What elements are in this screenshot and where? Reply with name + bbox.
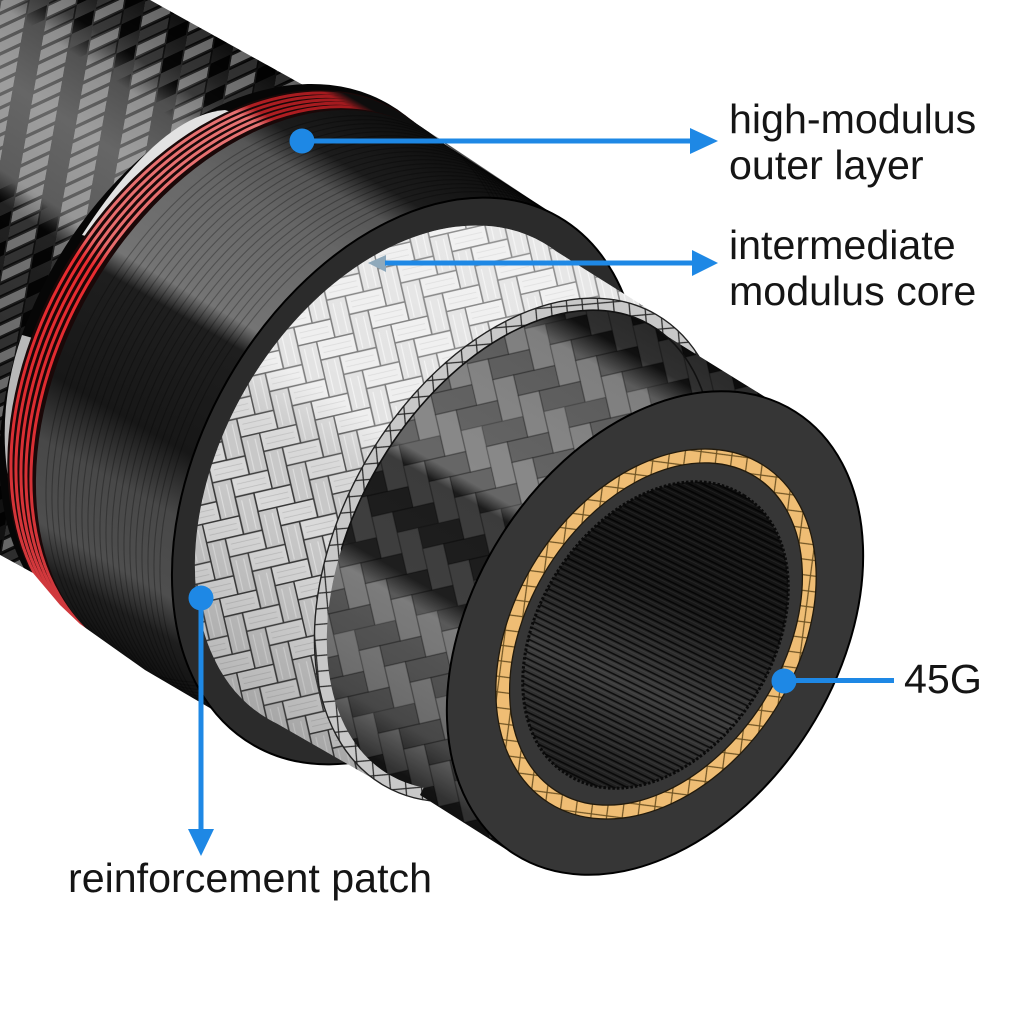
dark woven carbon barrel (326, 311, 765, 850)
callout: intermediate modulus core: intermediate (729, 222, 956, 268)
inner bore with ribbed surface (523, 482, 788, 788)
callout: intermediate modulus core: modulus core (729, 268, 976, 314)
front end face (361, 314, 949, 952)
callout: high-modulus outer layer (290, 96, 976, 188)
45G gold ring (430, 390, 882, 878)
callout: high-modulus outer layer: outer layer (729, 142, 924, 188)
callout: reinforcement patch (68, 586, 432, 901)
intermediate modulus core: white herringbone weave (194, 226, 651, 778)
far section: woven carbon tube (0, 0, 302, 568)
callout: 45G (772, 656, 982, 702)
callout: 45G: 45G (904, 656, 982, 702)
red stripe band (0, 5, 577, 743)
hatched edge ring of weave layer (230, 225, 810, 875)
callout: reinforcement patch: reinforcement patch (68, 855, 432, 901)
callout: high-modulus outer layer: high-modulus (729, 96, 976, 142)
carbon fibre tube assembly (0, 0, 864, 876)
white gap ring (5, 110, 240, 548)
callout: intermediate modulus core (368, 222, 976, 314)
outer layer end face ring (76, 114, 736, 848)
high-modulus outer layer cylinder (0, 32, 724, 842)
black shoulder behind band (0, 0, 569, 737)
